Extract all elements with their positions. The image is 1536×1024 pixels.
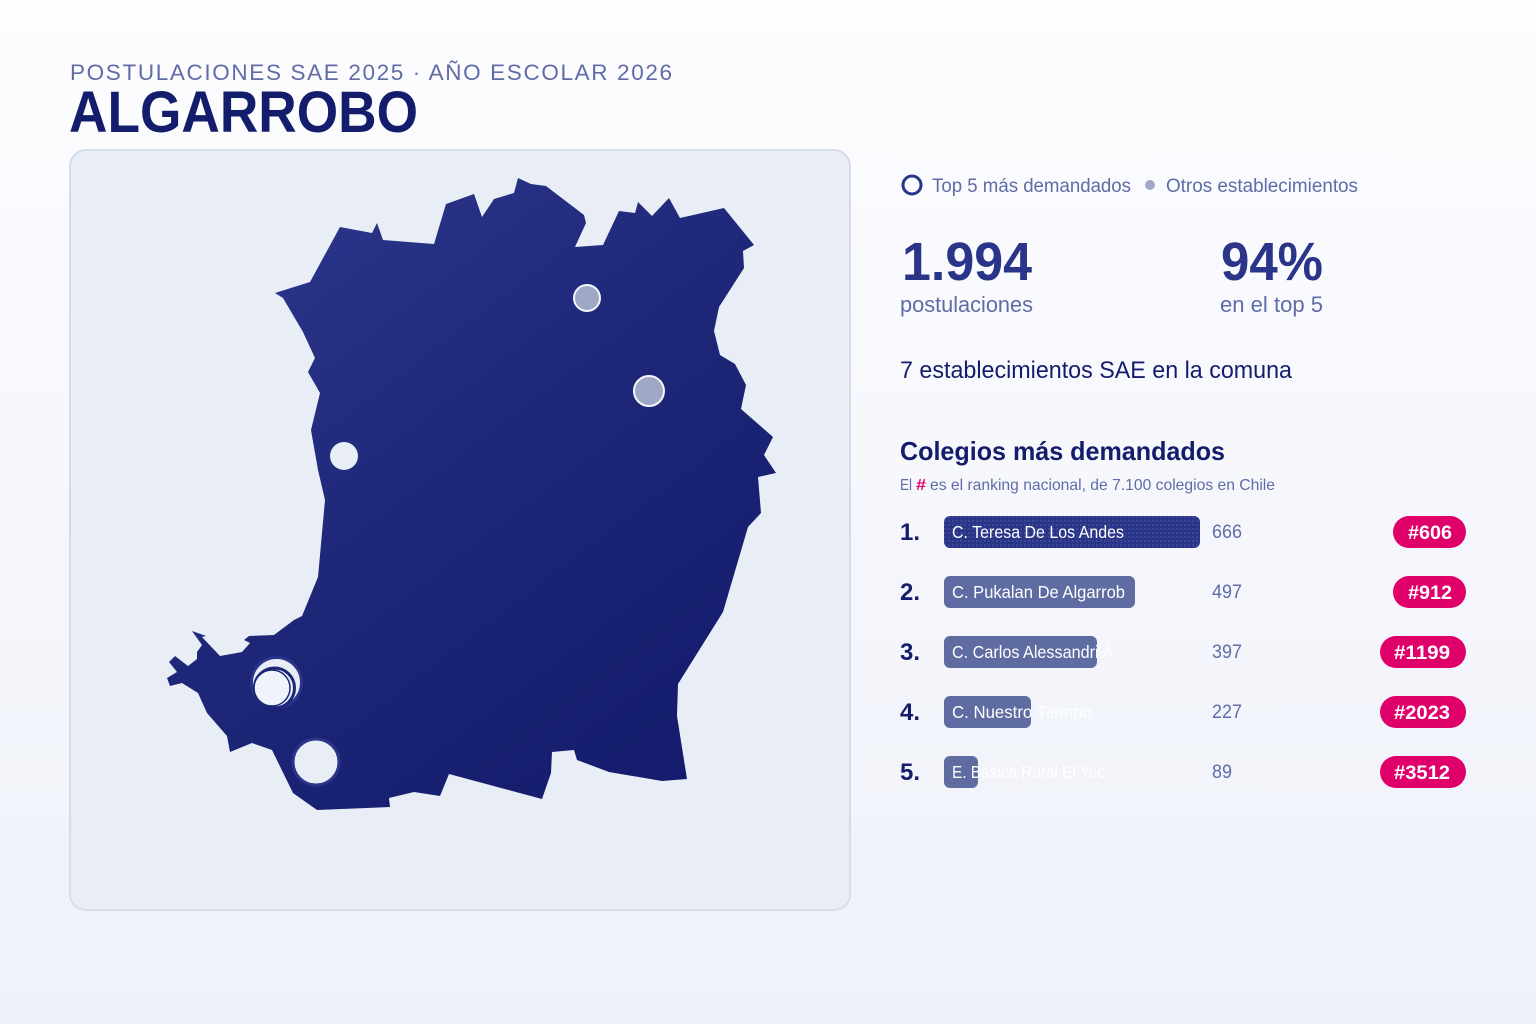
row 1: 1.: [900, 519, 920, 546]
row 1: C. Teresa De Los Andes: [952, 522, 1124, 542]
row 4: #2023: [1394, 703, 1450, 724]
row 1: #606: [1408, 523, 1452, 544]
row 4: 4.: [900, 699, 920, 726]
row 2: 2.: [900, 579, 920, 606]
marker: top school west: [330, 442, 358, 470]
row 2: [900, 576, 1466, 608]
row 4: [900, 696, 1466, 728]
text: ranking note: #: [916, 477, 926, 494]
marker: other school east: [634, 376, 664, 406]
row 4: 227: [1212, 702, 1242, 723]
stat: top 5 share: en el top 5: [1220, 292, 1323, 317]
row 4: C. Nuestro Tiempo: [952, 702, 1092, 722]
text: ranking note: El: [900, 477, 912, 494]
row 3: 3.: [900, 639, 920, 666]
row 5: [900, 756, 1466, 788]
row 3: #1199: [1394, 643, 1450, 664]
legend: Otros establecimientos: [1166, 176, 1358, 197]
icon: other schools dot: [1145, 180, 1155, 190]
row 5: 5.: [900, 759, 920, 786]
row 1: [900, 516, 1466, 548]
title: ALGARROBO: [69, 80, 418, 145]
row 2: C. Pukalan De Algarrob: [952, 582, 1125, 602]
row 5: 89: [1212, 762, 1232, 783]
marker: top school south: [293, 739, 339, 785]
stat: applications: postulaciones: [900, 292, 1033, 317]
legend: [903, 176, 1358, 197]
legend: Top 5 más demandados: [932, 176, 1131, 197]
stat: applications: [900, 232, 1033, 317]
marker: other school north: [574, 285, 600, 311]
row 5: #3512: [1394, 763, 1450, 784]
row 2: #912: [1408, 583, 1452, 604]
row 2: 497: [1212, 582, 1242, 603]
panel: map: [70, 150, 850, 910]
row 3: C. Carlos Alessandri A: [952, 642, 1113, 662]
row 3: [900, 636, 1466, 668]
heading: most demanded schools: Colegios más demandados: [900, 436, 1225, 466]
row 5: E. Basica Rural El Yec: [952, 762, 1105, 782]
marker: overlapping top schools: [252, 658, 302, 708]
stat: top 5 share: [1220, 232, 1323, 317]
stat: top 5 share: 94%: [1221, 232, 1323, 292]
stat: applications: 1.994: [902, 232, 1032, 292]
row 3: 397: [1212, 642, 1242, 663]
subtitle: POSTULACIONES SAE 2025 · AÑO ESCOLAR 2026: [70, 60, 672, 85]
icon: top 5 ring: [903, 176, 921, 194]
map: comuna outline: [167, 178, 776, 810]
text: ranking note: es el ranking nacional, de 7.100 colegios en Chile: [930, 477, 1275, 494]
row 1: 666: [1212, 522, 1242, 543]
text: schools count: 7 establecimientos SAE en la comuna: [900, 357, 1293, 384]
